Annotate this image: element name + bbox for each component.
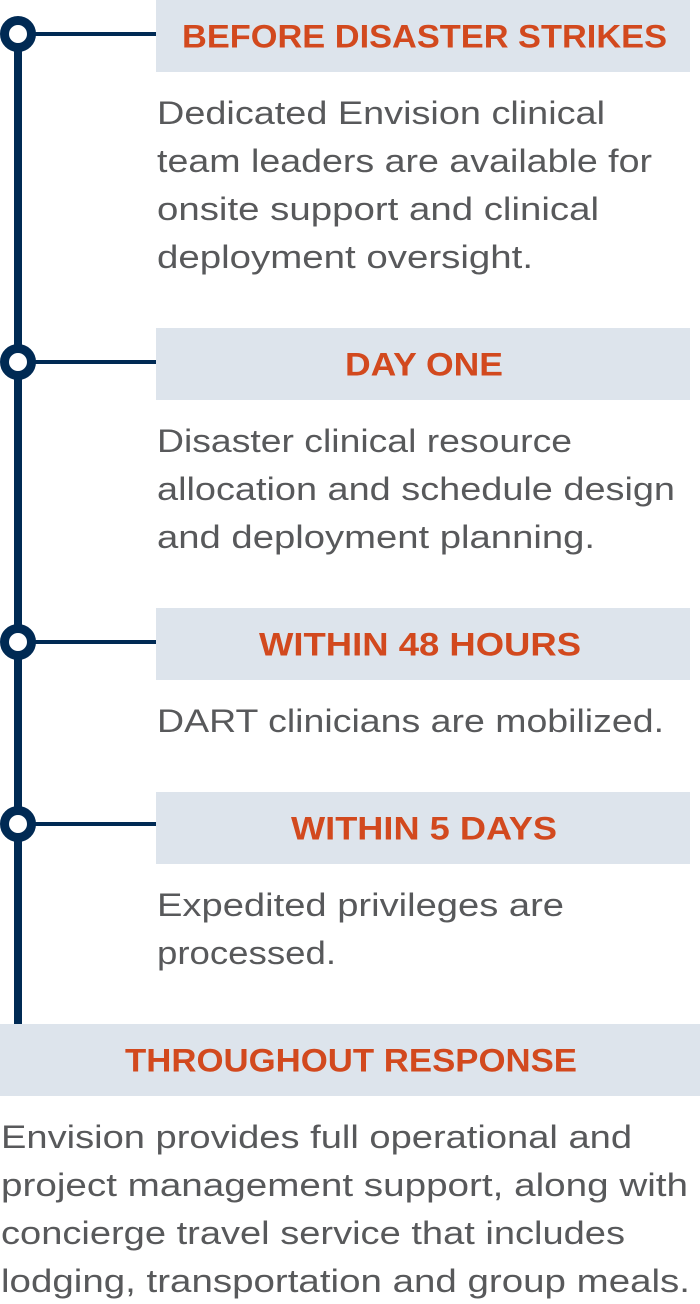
heading: within 48 hours: [156, 608, 690, 680]
text: within 48 hours: DART clinicians are mobilized.: [157, 703, 664, 739]
marker: within 48 hours: [4, 628, 156, 656]
text: within 5 days: Expedited privileges are: [157, 887, 564, 923]
text: within 5 days: [157, 887, 564, 971]
text: throughout response: lodging, transportation and group meals.: [1, 1263, 690, 1299]
text: day one: allocation and schedule design: [157, 471, 675, 507]
marker: within 5 days: [4, 810, 156, 838]
text: within 5 days: processed.: [157, 935, 336, 971]
timeline spine: [14, 34, 22, 1024]
text: before disaster strikes: Dedicated Envision clinical: [157, 95, 605, 131]
text: before disaster strikes: deployment oversight.: [157, 239, 533, 275]
heading: within 5 days: [156, 792, 690, 864]
heading: before disaster strikes: BEFORE DISASTER STRIKES: [182, 18, 667, 54]
heading: throughout response: [0, 1024, 700, 1096]
marker: day one: [4, 348, 156, 376]
text: throughout response: concierge travel service that includes: [1, 1215, 625, 1251]
text: day one: and deployment planning.: [157, 519, 595, 555]
text: throughout response: Envision provides full operational and: [1, 1119, 632, 1155]
text: before disaster strikes: team leaders are available for: [157, 143, 652, 179]
text: day one: [157, 423, 675, 555]
heading: day one: [156, 328, 690, 400]
text: before disaster strikes: [157, 95, 652, 275]
text: throughout response: [1, 1119, 690, 1299]
heading: within 48 hours: WITHIN 48 HOURS: [259, 626, 581, 662]
heading: before disaster strikes: [156, 0, 690, 72]
text: throughout response: project management support, along with: [1, 1167, 688, 1203]
heading: within 5 days: WITHIN 5 DAYS: [291, 810, 557, 846]
heading: throughout response: THROUGHOUT RESPONSE: [125, 1042, 577, 1078]
text: day one: Disaster clinical resource: [157, 423, 572, 459]
marker: before disaster strikes: [4, 20, 156, 48]
heading: day one: DAY ONE: [345, 346, 503, 382]
text: before disaster strikes: onsite support and clinical: [157, 191, 599, 227]
